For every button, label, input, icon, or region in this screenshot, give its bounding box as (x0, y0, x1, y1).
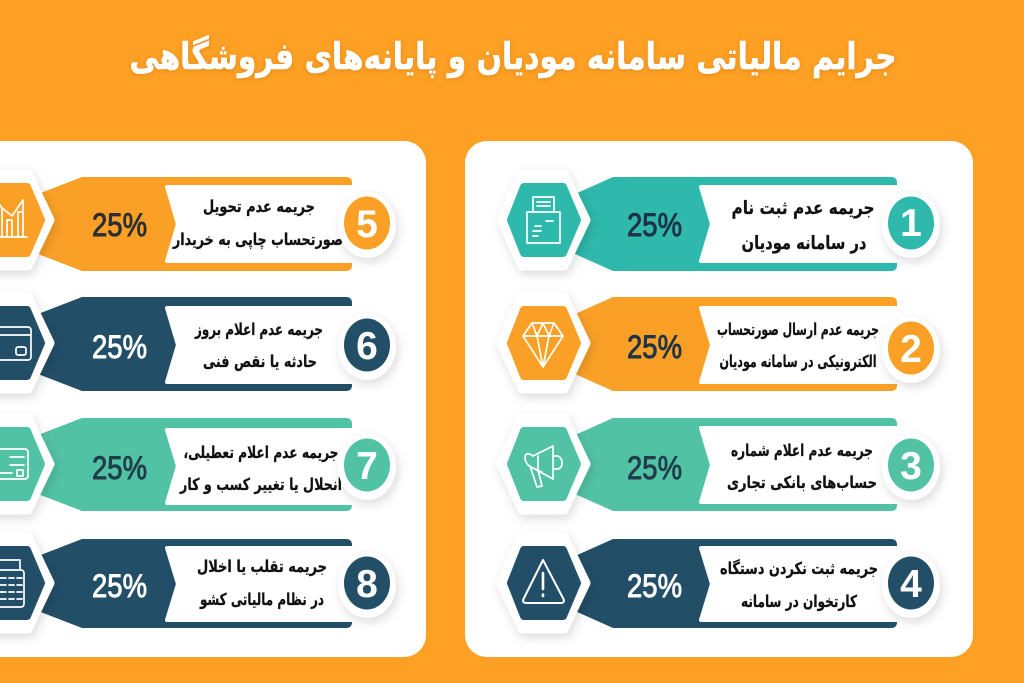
icon: calendar keypad (0, 560, 24, 607)
percent: 25% (627, 329, 682, 365)
label text: در نظام مالیاتی کشو (199, 590, 324, 610)
label text (732, 198, 874, 254)
number badge: 5 (356, 203, 378, 246)
number badge (344, 318, 390, 372)
row 8 (0, 537, 396, 629)
number badge (888, 438, 934, 492)
icon: diamond (523, 323, 563, 367)
number badge: 7 (356, 445, 378, 488)
row 4 (501, 537, 940, 629)
number badge: 3 (900, 445, 922, 488)
percent: 25% (92, 329, 147, 365)
number badge: 1 (900, 202, 922, 245)
label text (194, 320, 323, 371)
label text: جریمه ثبت نکردن دستگاه (720, 558, 878, 579)
row 6 (0, 297, 396, 391)
number badge: 8 (356, 563, 378, 606)
label text: جریمه عدم اعلام تعطیلی، (184, 443, 338, 463)
number badge (888, 556, 934, 610)
label text: جریمه عدم تحویل (203, 197, 315, 217)
label text: کارتخوان در سامانه (741, 592, 857, 612)
label text (727, 441, 877, 492)
icon: megaphone (525, 446, 562, 487)
label text: جریمه عدم اعلام بروز (194, 320, 323, 340)
icon: document printer (527, 197, 560, 243)
row 1 (501, 174, 940, 271)
icon: warning triangle (523, 560, 564, 603)
icon: id card (0, 449, 28, 479)
number badge: 2 (900, 328, 922, 371)
row 2 (501, 297, 940, 391)
label text (197, 557, 327, 610)
percent: 25% (92, 207, 147, 243)
row 3 (501, 418, 940, 511)
number badge: 6 (356, 325, 378, 368)
panel: left column, crimes 5 to 8 (0, 141, 426, 657)
label text: حساب‌های بانکی تجاری (727, 473, 877, 492)
label text: جریمه عدم ارسال صورتحساب (717, 320, 879, 340)
label text: انحلال یا تغییر کسب و کار (179, 475, 342, 495)
label text (179, 443, 342, 495)
percent: 25% (92, 568, 147, 604)
label text (172, 197, 343, 250)
percent: 25% (627, 207, 682, 243)
percent: 25% (627, 568, 682, 604)
label text: جریمه تقلب یا اخلال (197, 557, 327, 577)
label text (717, 320, 879, 372)
label text: جریمه عدم اعلام شماره (731, 441, 873, 461)
number badge (888, 322, 934, 374)
icon: bank card (0, 327, 31, 360)
number badge: 4 (900, 563, 922, 606)
label text: جریمه عدم ثبت نام (732, 198, 874, 219)
label text: الکترونیکی در سامانه مودیان (720, 352, 876, 372)
row 7 (0, 418, 396, 511)
percent: 25% (92, 450, 147, 486)
percent: 25% (627, 450, 682, 486)
label text: در سامانه مودیان (742, 233, 866, 254)
icon: bar chart (0, 200, 27, 237)
label text: حادثه یا نقص فنی (203, 352, 317, 371)
label text: صورتحساب چاپی به خریدار (172, 230, 343, 250)
number badge (344, 196, 390, 250)
label text (720, 558, 878, 612)
number badge (344, 556, 390, 610)
row 5 (0, 174, 396, 271)
number badge (344, 438, 390, 492)
number badge (888, 196, 934, 250)
panel: right column, crimes 1 to 4 (465, 141, 973, 657)
